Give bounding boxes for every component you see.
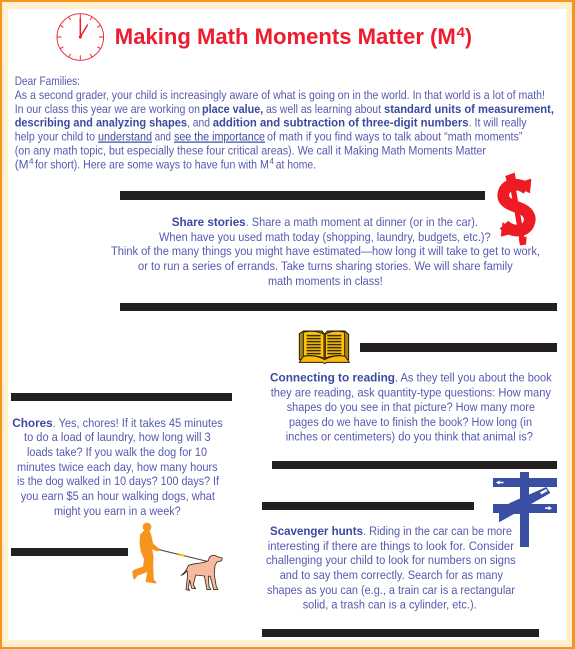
icon: red clock [57,14,104,60]
text block: chores: is the dog walked in 10 days? 100 days? If [17,474,220,488]
icon: person walking dog [133,523,222,590]
text block: share stories: Share stories [172,215,246,229]
divider bar 1 [120,191,485,200]
text block: letter to families: help your child to [15,130,95,144]
text block: letter to families: for short). Here are some ways to have fun with M [35,158,269,172]
text block: scavenger hunts: shapes as you can (e.g., a train car is a rectangular [267,583,515,597]
text block: connecting to reading: inches or centimeters) do you think that animal is? [286,430,533,444]
divider bar 2 [120,303,557,311]
text block: letter to families: standard units of measurement, [384,102,554,116]
text block: share stories: or to run a series of errands. Take turns sharing stories. We will share family [138,259,514,273]
title: ) [465,24,472,49]
divider bar 3 [360,343,557,352]
text block: share stories: When have you used math today (shopping, laundry, budgets, etc.)? [159,230,491,244]
text block: chores: . Yes, chores! If it takes 45 minutes [53,416,223,430]
text block: chores [12,416,223,518]
title: Making Math Moments Matter (M [115,24,456,49]
icon: red dollar sign [501,173,531,245]
text block: letter to families: at home. [276,158,316,172]
text block: share stories [111,215,540,288]
text block: connecting to reading: shapes do you see in that picture? How many more [287,400,535,414]
text block: letter to families: see the importance [174,130,265,144]
text block: scavenger hunts: and to say them correctly. Search for as many [280,568,504,582]
text block: letter to families: . It will really [469,116,527,130]
text block: share stories: math moments in class! [268,274,383,288]
text block: chores: might you earn in a week? [54,504,181,518]
divider bar 7 [262,502,474,510]
text block: letter to families: of math if you find ways to talk about “math moments” [267,130,522,144]
icon: blue street signs [493,472,557,547]
text block: chores: you earn $5 an hour walking dogs, what [21,489,216,503]
text block: share stories: Think of the many things you might have estimated—how long it will take to get to work, [111,244,540,258]
text block: chores: to do a load of laundry, how long will 3 [24,430,211,444]
text block: scavenger hunts [266,524,516,612]
icon: open book [299,331,349,364]
text block: letter to families: understand [98,130,152,144]
text block: letter to families: place value, [202,102,263,116]
text block: letter to families: (on any math topic, but especially these four critical areas). We call it Making Math Moments Matter [15,144,486,158]
text block: letter to families: and [155,130,171,144]
text block: chores: minutes twice each day, how many hours [17,460,218,474]
divider bar 5 [11,393,232,401]
text block: connecting to reading: . As they tell you about the book [395,371,553,385]
text block: scavenger hunts: challenging your child to look for numbers on signs [266,553,516,567]
text block: connecting to reading [270,371,553,444]
text block: connecting to reading: they are reading, ask quantity-type questions: How many [271,386,552,400]
text block: connecting to reading: Connecting to reading [270,371,395,385]
text block: letter to families: Dear Families: [15,74,80,88]
text block: letter to families: addition and subtraction of three-digit numbers [213,116,469,130]
text block: letter to families: describing and analyzing shapes [15,116,187,130]
divider bar 6 [11,548,128,556]
text block: connecting to reading: pages do we have to finish the book? How long (in [289,415,532,429]
text block: share stories: . Share a math moment at dinner (or in the car). [246,215,478,229]
text block: letter to families: 4 [29,157,34,166]
text block: letter to families: (M [15,158,29,172]
text block: scavenger hunts: interesting if there are things to look for. Consider [268,539,514,553]
text block: letter to families: 4 [270,157,274,166]
divider bar 4 [272,461,557,469]
divider bar 8 [262,629,539,637]
text block: scavenger hunts: solid, a trash can is a cylinder, etc.). [303,598,477,612]
text block: scavenger hunts: . Riding in the car can be more [363,524,512,538]
text block: letter to families: In our class this year we are working on [15,102,200,116]
text block: chores: loads take? If you walk the dog for 10 [27,445,207,459]
text block: letter to families [15,74,554,172]
text block: letter to families: , and [187,116,210,130]
text block: scavenger hunts: Scavenger hunts [270,524,363,538]
title: 4 [456,24,465,40]
text block: chores: Chores [12,416,53,430]
text block: letter to families: as well as learning about [266,102,382,116]
